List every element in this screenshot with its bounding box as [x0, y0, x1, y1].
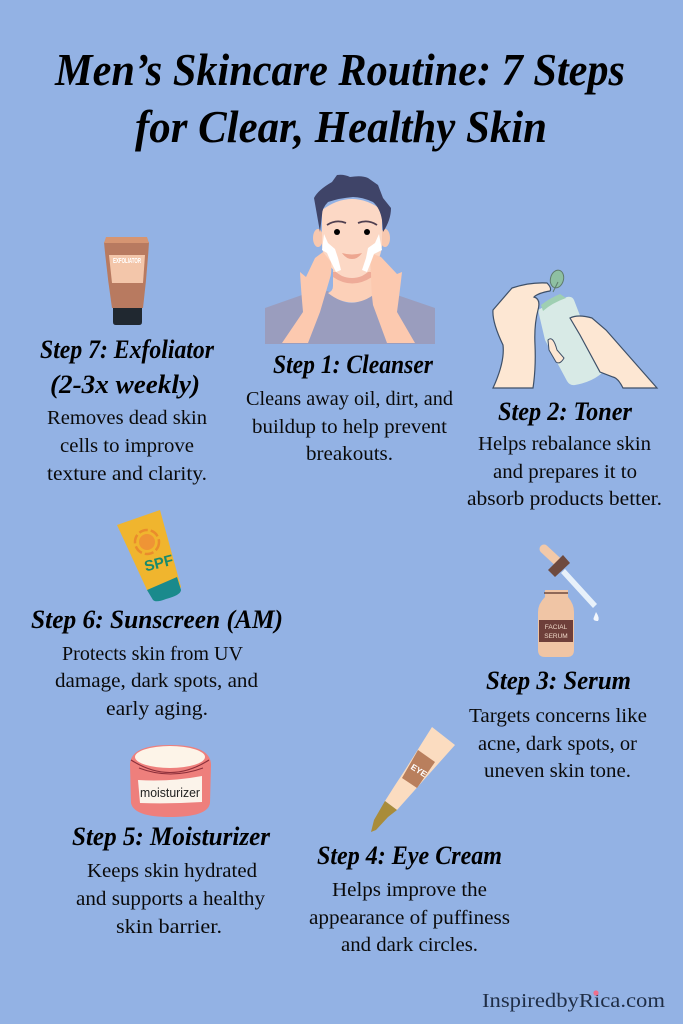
- icon: eye cream tube: EYE: [409, 762, 429, 779]
- step 5 text: and supports a healthy: [76, 889, 265, 910]
- step 7 text: Removes dead skin: [47, 408, 207, 429]
- icon: sunscreen tube: SPF: [143, 552, 175, 575]
- step 7 text: Step 7: Exfoliator: [40, 335, 215, 364]
- step 6 text: Step 6: Sunscreen (AM): [31, 605, 283, 634]
- footer: website credit: InspiredbyRica.com: [482, 990, 665, 1012]
- step 3 text: acne, dark spots, or: [478, 734, 638, 755]
- step 2 text: Helps rebalance skin: [478, 434, 651, 455]
- step 4 text: [309, 841, 510, 956]
- step 7 text: [40, 335, 215, 485]
- step 6 text: early aging.: [106, 699, 208, 720]
- icon: toner bottle with hands: [493, 269, 657, 388]
- step 2 text: [467, 397, 662, 510]
- icon: exfoliator tube: EXFOLIATOR: [113, 258, 141, 265]
- icon: man washing face: [265, 175, 435, 344]
- step 4 text: and dark circles.: [341, 935, 478, 956]
- icon: sunscreen tube: [117, 510, 181, 601]
- icon: serum dropper bottle: SERUM: [544, 633, 568, 640]
- step 6 text: [31, 605, 283, 720]
- icon: serum dropper bottle: FACIAL: [545, 624, 568, 631]
- step 5 text: Step 5: Moisturizer: [72, 822, 271, 851]
- title: Men’s Skincare Routine: 7 Steps: [54, 44, 625, 95]
- step 5 text: Keeps skin hydrated: [87, 861, 257, 882]
- step 2 text: absorb products better.: [467, 489, 662, 510]
- step 7 text: cells to improve: [60, 436, 194, 457]
- step 5 text: skin barrier.: [116, 917, 222, 938]
- step 1 text: Step 1: Cleanser: [273, 350, 434, 379]
- step 1 text: [246, 350, 453, 465]
- step 3 text: uneven skin tone.: [484, 761, 631, 782]
- title: [54, 44, 625, 152]
- step 6 text: Protects skin from UV: [62, 644, 243, 665]
- step 3 text: [469, 666, 647, 782]
- step 1 text: buildup to help prevent: [252, 417, 448, 438]
- icon: eye cream tube: [371, 727, 455, 832]
- step 4 text: Step 4: Eye Cream: [317, 841, 502, 870]
- step 4 text: Helps improve the: [332, 880, 487, 901]
- icon: moisturizer jar: [130, 745, 211, 817]
- step 7 text: (2-3x weekly): [50, 370, 200, 399]
- icon: exfoliator tube: [104, 237, 149, 325]
- step 2 text: and prepares it to: [493, 462, 637, 483]
- icon: serum dropper bottle: [538, 549, 599, 657]
- step 4 text: appearance of puffiness: [309, 908, 510, 929]
- step 7 text: texture and clarity.: [47, 464, 207, 485]
- step 1 text: breakouts.: [306, 444, 393, 465]
- step 1 text: Cleans away oil, dirt, and: [246, 389, 453, 410]
- icon: moisturizer jar: moisturizer: [140, 786, 200, 800]
- step 3 text: Targets concerns like: [469, 706, 647, 727]
- step 2 text: Step 2: Toner: [498, 397, 633, 426]
- title: for Clear, Healthy Skin: [135, 101, 547, 152]
- step 6 text: damage, dark spots, and: [55, 671, 258, 692]
- step 3 text: Step 3: Serum: [486, 666, 631, 695]
- step 5 text: [72, 822, 271, 938]
